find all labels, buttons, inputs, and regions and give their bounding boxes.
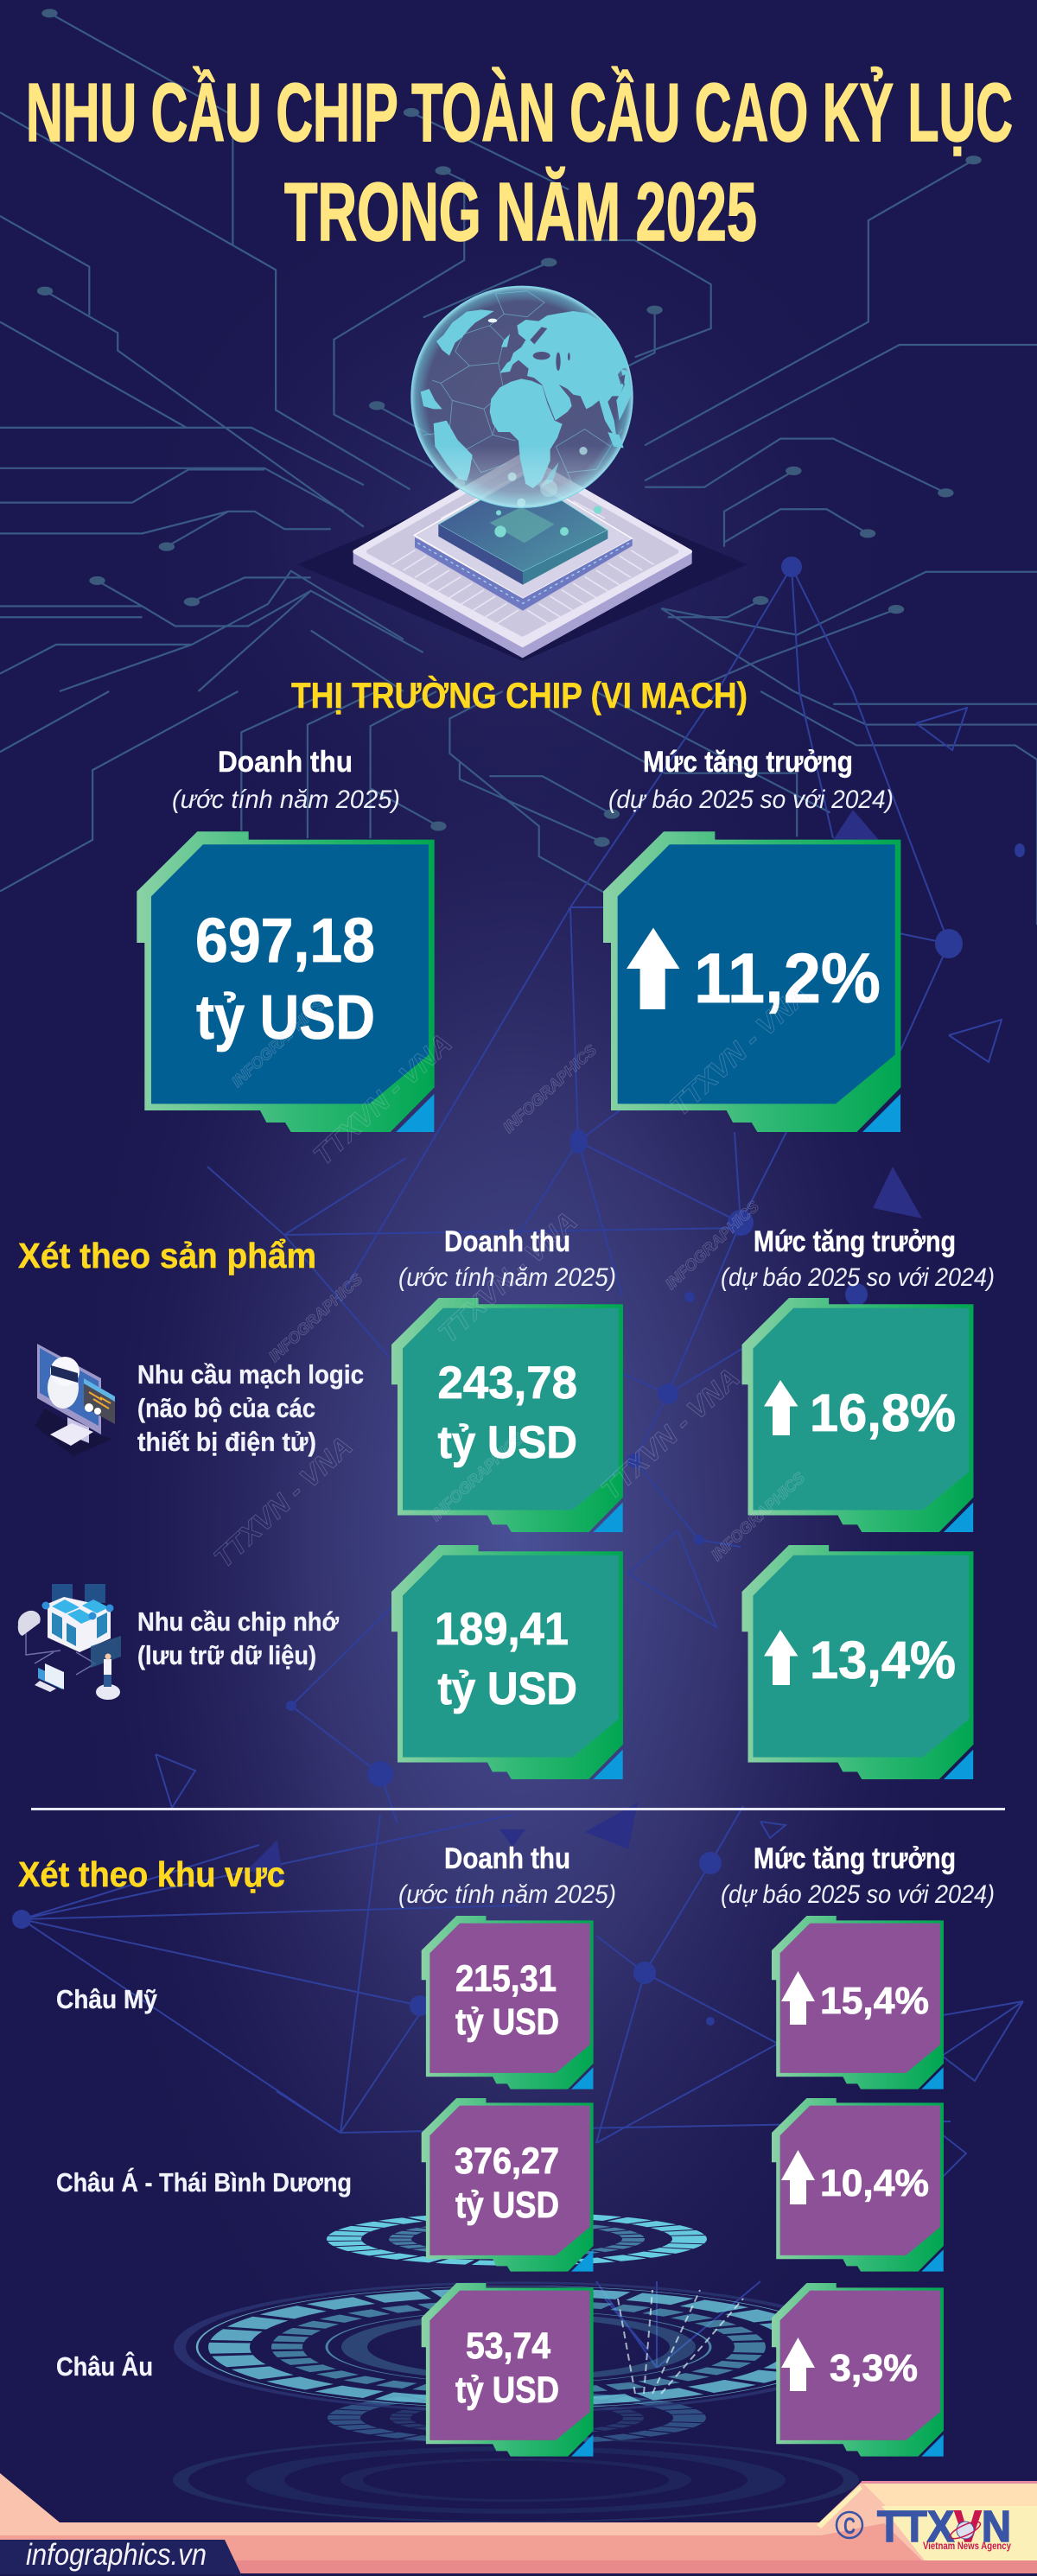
section heading: by region: Xét theo khu vực [18,1854,285,1894]
column headers: by region: Doanh thu [444,1842,570,1875]
panel: total revenue: tỷ USD [196,983,375,1053]
globe sphere [411,286,633,507]
ring: lower small [344,2394,690,2442]
panel: memory revenue: tỷ USD [437,1663,577,1714]
label: memory demand: Nhu cầu chip nhớ [137,1607,339,1637]
globe highlights [454,447,588,507]
section heading: by product: Xét theo sản phẩm [18,1236,316,1275]
column header: growth [608,746,894,814]
panel: Americas revenue: 215,31 [455,1958,557,2000]
panel: total growth [603,831,900,1132]
footer site plate [0,2540,241,2574]
panel: Americas revenue [422,1916,594,2089]
panel: Europe revenue: tỷ USD [455,2369,559,2411]
column headers: by region: (dự báo 2025 so với 2024) [721,1880,995,1909]
illustration: chip with globe hologram [297,286,748,661]
decorative data rings [180,2215,857,2522]
panel: Asia-Pacific growth [772,2098,944,2272]
globe hex mesh [423,291,622,487]
watermarks: TTXVN - VNA [207,1430,359,1574]
chip base top [355,455,690,646]
panel: Americas growth [772,1916,944,2089]
panel: memory growth [741,1545,973,1779]
icon: robot on monitor [35,1344,115,1456]
panel: logic revenue: tỷ USD [437,1417,577,1468]
column headers: by product: Mức tăng trưởng [754,1225,956,1258]
label: logic demand: (não bộ của các [137,1394,315,1423]
panel: Americas growth: 15,4% [820,1980,929,2022]
watermarks [207,978,815,1574]
network lines and triangles [12,557,1025,2368]
panel: Asia-Pacific revenue [422,2098,594,2272]
panel: Europe growth: 3,3% [830,2347,918,2389]
label: logic demand: thiết bị điện tử) [137,1428,316,1457]
watermarks: TTXVN - VNA [432,1205,583,1349]
column headers: by region: Mức tăng trưởng [754,1842,956,1875]
arrow up [764,1630,798,1685]
label: logic demand: Nhu cầu mạch logic [137,1360,364,1390]
ring: dark lower [181,2439,851,2522]
title: TRONG NĂM 2025 [284,166,757,258]
divider [31,1808,1005,1810]
logo: TTXVN: Vietnam News Agency [923,2540,1011,2552]
footer site name: infographics.vn [26,2538,207,2572]
globe inland seas [530,327,625,386]
main heading: chip market: THỊ TRƯỜNG CHIP (VI MẠCH) [291,674,748,716]
panel: Asia-Pacific revenue: tỷ USD [455,2185,559,2226]
watermarks: INFOGRAPHICS [662,1198,762,1293]
panel: total revenue: 697,18 [195,906,375,976]
panel: memory revenue: 189,41 [435,1604,569,1655]
watermarks: INFOGRAPHICS [499,1041,600,1136]
column headers: by region: (ước tính năm 2025) [398,1880,616,1909]
panel: memory growth: 13,4% [810,1631,956,1689]
footer band [0,2473,1037,2574]
watermarks: INFOGRAPHICS [265,1270,366,1365]
chip seat [414,473,633,599]
panel: Asia-Pacific growth: 10,4% [820,2162,929,2204]
panel: Europe revenue [422,2283,594,2457]
ring: light beams [618,2290,743,2394]
panel: Europe growth [772,2283,944,2457]
logo: TTXVN: TTXVN [877,2502,1011,2551]
circuit lines: upper area [0,9,1037,691]
watermarks: INFOGRAPHICS [708,1469,808,1564]
circuit lines: middle area [0,691,1037,925]
panel: Europe revenue: 53,74 [466,2325,550,2367]
globe base haze [412,287,632,507]
column headers: by product: (ước tính năm 2025) [398,1263,616,1292]
chip traces [391,493,654,625]
panel: logic revenue [391,1298,623,1532]
ring: large main [180,2283,857,2411]
column headers: by region [398,1842,995,1909]
panel: total revenue [137,831,435,1132]
arrow up [781,2150,815,2204]
column headers: by product [398,1225,995,1292]
label: Americas: Châu Mỹ [56,1985,157,2014]
chip shadow [297,469,748,661]
watermarks: TTXVN - VNA [307,1027,458,1171]
watermarks: INFOGRAPHICS [228,995,328,1091]
watermarks: INFOGRAPHICS [427,1429,527,1524]
column header: revenue: Doanh thu [218,746,353,779]
label: Europe: Châu Âu [56,2350,153,2382]
panel: logic revenue: 243,78 [437,1358,577,1409]
panel: total growth: 11,2% [694,939,881,1018]
arrow up [627,928,679,1009]
column header: growth: (dự báo 2025 so với 2024) [608,786,894,814]
arrow up [764,1380,798,1435]
copyright mark: C [843,2513,856,2539]
column header: revenue: (ước tính năm 2025) [172,786,400,814]
label: memory demand: (lưu trữ dữ liệu) [137,1641,316,1670]
label: Asia-Pacific: Châu Á - Thái Bình Dương [56,2167,352,2198]
chip base side [354,553,690,657]
icon: data servers [18,1584,121,1700]
globe continents [421,309,632,488]
column headers: by product: Doanh thu [444,1225,570,1258]
label: memory demand [137,1607,339,1670]
column headers: by product: (dự báo 2025 so với 2024) [721,1263,995,1292]
panel: logic growth [741,1298,973,1532]
panel: Americas revenue: tỷ USD [455,2001,559,2043]
panel: Asia-Pacific revenue: 376,27 [455,2140,559,2182]
watermarks: TTXVN - VNA [664,978,815,1122]
chip inner panel [369,464,677,634]
label: logic demand [137,1360,364,1457]
column header: growth: Mức tăng trưởng [643,746,853,779]
arrow up [781,2337,815,2391]
copyright mark [837,2512,862,2539]
arrow up [781,1971,815,2025]
column header: revenue [172,746,400,814]
watermarks: TTXVN - VNA [595,1362,746,1505]
chip die [438,475,608,585]
panel: logic growth: 16,8% [810,1383,956,1442]
title [26,66,1013,258]
panel: memory revenue [391,1545,623,1779]
ring: upper small [344,2215,690,2263]
